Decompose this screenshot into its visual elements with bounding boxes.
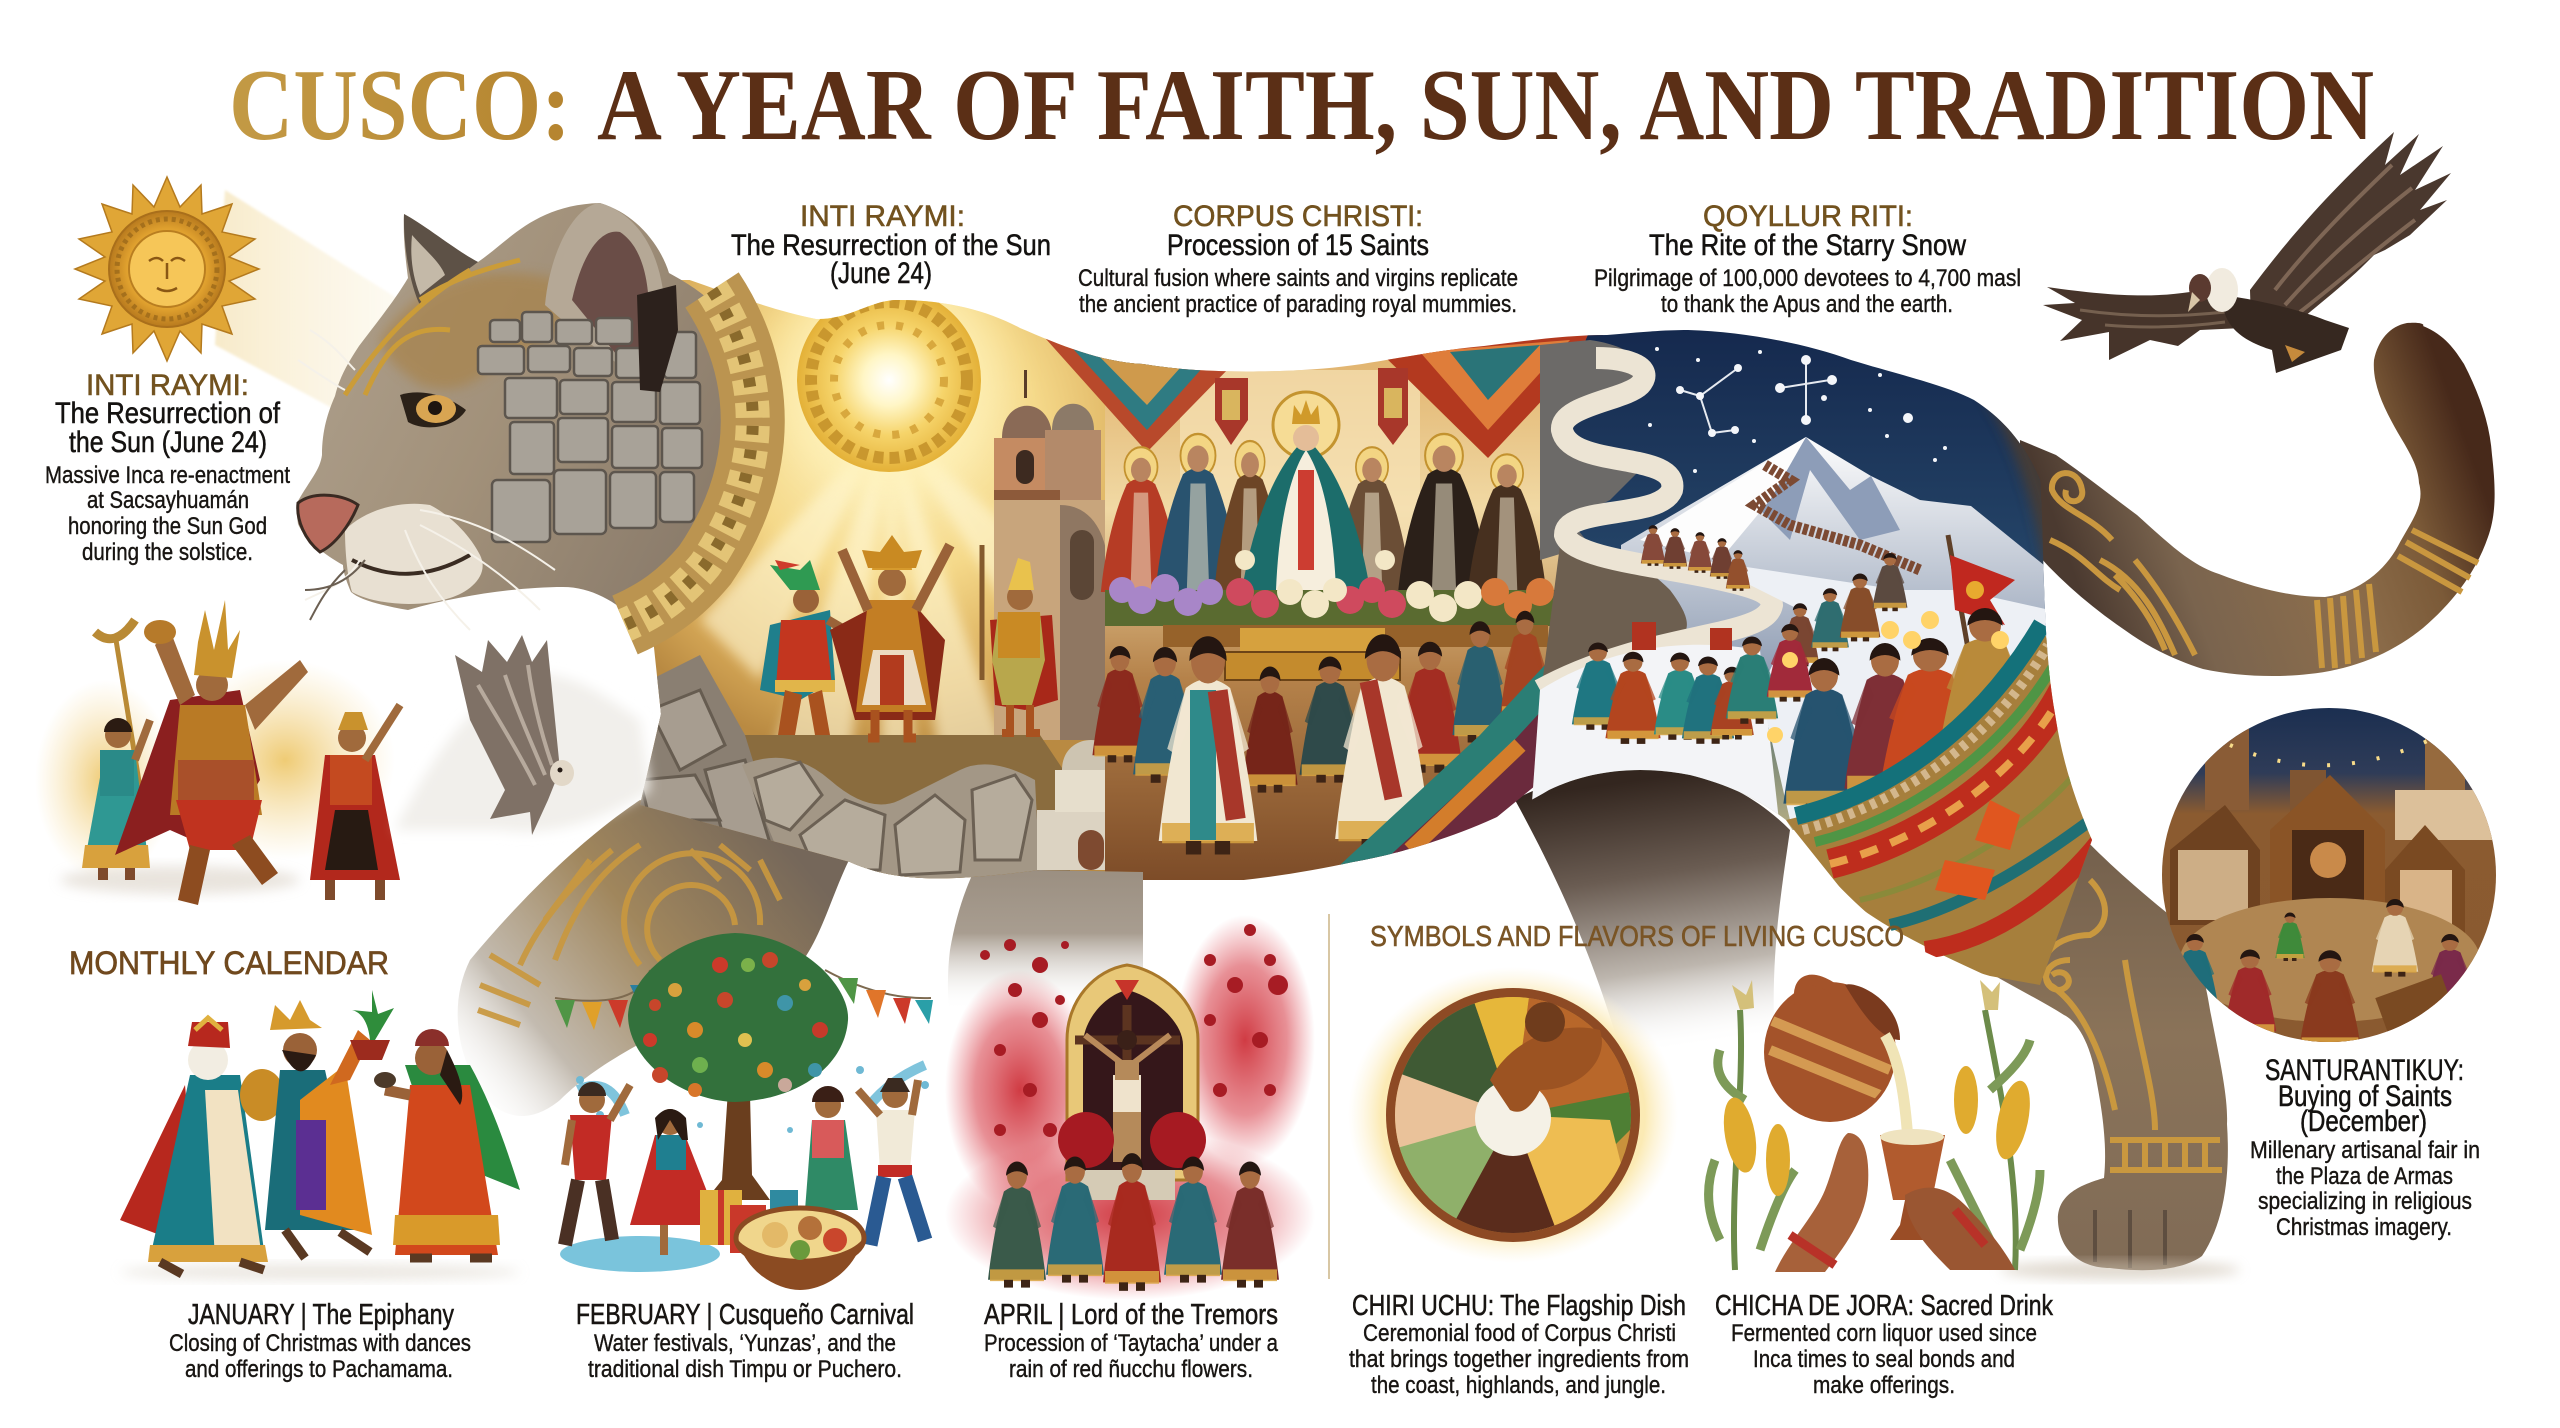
puma tail (2020, 323, 2495, 676)
flag with sun (1948, 535, 2015, 660)
text block: Qoyllur Riti: to thank the Apus and the earth. (1661, 291, 1953, 318)
text block: Qoyllur Riti: The Rite of the Starry Snow (1649, 229, 1966, 262)
text block: Santurantikuy (2250, 1054, 2480, 1241)
text block: Santurantikuy: Christmas imagery. (2276, 1214, 2452, 1241)
king 3 (374, 1029, 520, 1258)
pilgrim line on the mountain (1755, 465, 1920, 570)
eye (400, 392, 466, 427)
left text block: Inti Raymi: Massive Inca re-enactment (45, 462, 290, 489)
virgin with halo and saints (1101, 392, 1546, 592)
church towers (994, 370, 1109, 740)
text block: Corpus Christi: Cultural fusion where saints and virgins replicate (1078, 265, 1518, 292)
heading: symbols and flavors: SYMBOLS AND FLAVORS OF LIVING CUSCO (1370, 921, 1904, 953)
pouring chicha stream (1885, 1035, 1908, 1140)
section: Inti Raymi golden scene (640, 280, 1140, 878)
puma near rear leg with gold patterns (1985, 800, 2240, 1279)
winding snow road and stone wall (1530, 358, 2050, 830)
caption: February: Water festivals, ‘Yunzas’, and the (594, 1330, 896, 1357)
caption: April: Procession of ‘Taytacha’ under a (984, 1330, 1279, 1357)
text block: Santurantikuy: (December) (2300, 1105, 2427, 1138)
flower row (1105, 550, 1555, 626)
sun disc (774, 300, 1008, 472)
text block: Corpus Christi (1078, 200, 1518, 318)
caption: Chiri Uchu: Ceremonial food of Corpus Christi (1363, 1320, 1676, 1347)
procession figures (988, 1153, 1279, 1291)
tan forehead patch (380, 272, 569, 389)
caption: Chiri Uchu: CHIRI UCHU: The Flagship Dish (1352, 1290, 1686, 1322)
tree canopy (628, 933, 848, 1102)
king 1 (120, 1018, 284, 1274)
caption: February (576, 1299, 914, 1383)
woman right (310, 705, 400, 900)
illustration: Chicha de Jora (1709, 980, 2040, 1272)
woman left (82, 718, 150, 880)
caption: Chicha de Jora: make offerings. (1813, 1372, 1955, 1399)
caption: April (984, 1299, 1279, 1383)
left text block: Inti Raymi: at Sacsayhuamán (87, 487, 249, 514)
icon: condor in flight (2043, 132, 2451, 373)
crowd (1092, 611, 1550, 854)
left text block: Inti Raymi: the Sun (June 24) (69, 426, 267, 459)
left text block: Inti Raymi: The Resurrection of (55, 397, 281, 430)
left text block: Inti Raymi: INTI RAYMI: (86, 369, 249, 402)
left dancers illustration (35, 600, 400, 905)
text block: Inti Raymi centre: (June 24) (830, 257, 932, 290)
text block: Corpus Christi: the ancient practice of parading royal mummies. (1079, 291, 1517, 318)
text block: Santurantikuy: specializing in religious (2258, 1188, 2472, 1215)
light beam from sun icon to puma head (215, 190, 400, 415)
illustration: April Lord of the Tremors (945, 915, 1315, 1300)
heading: monthly calendar: MONTHLY CALENDAR (69, 945, 389, 981)
icon: small eagle (455, 635, 574, 835)
puma front leg with gold patterns (458, 800, 849, 1116)
gifts (700, 1190, 798, 1253)
stars and constellations (1648, 347, 1947, 473)
stone blocks (478, 312, 702, 542)
caption: Chicha de Jora (1715, 1290, 2053, 1399)
ornaments (643, 952, 828, 1097)
warrior (115, 600, 308, 905)
market stalls (2170, 775, 2465, 940)
whiskers (298, 330, 555, 630)
textile band at hip (1786, 624, 2110, 990)
text block: Inti Raymi centre: The Resurrection of the Sun (731, 229, 1051, 262)
left text block: Inti Raymi (45, 369, 290, 566)
caption: Chiri Uchu: the coast, highlands, and jungle. (1371, 1372, 1666, 1399)
Inca figures (760, 535, 1058, 738)
greek key collar (625, 290, 753, 625)
string lights (2229, 740, 2428, 768)
text block: Santurantikuy: Buying of Saints (2278, 1080, 2452, 1113)
dark shadow behind ear (637, 285, 678, 392)
carnival dancers (565, 1078, 925, 1255)
corn plants (1709, 980, 2040, 1270)
illustration: January three kings (120, 990, 520, 1280)
caption: Chiri Uchu: that brings together ingredients from (1349, 1346, 1689, 1373)
text block: Inti Raymi centre (731, 200, 1051, 290)
staff (95, 620, 142, 800)
small colonial church (1037, 740, 1105, 870)
puma torso with festival scenes (600, 270, 2110, 990)
puma stone front leg (948, 790, 1143, 1050)
caption: April: APRIL | Lord of the Tremors (984, 1299, 1278, 1331)
left text block: Inti Raymi: during the solstice. (82, 539, 253, 566)
dish: Timpu bowl (736, 1208, 864, 1290)
section: Qoyllur Riti night scene (1530, 330, 2110, 990)
text block: Santurantikuy: the Plaza de Armas (2276, 1163, 2453, 1190)
caption: Chiri Uchu (1349, 1290, 1689, 1399)
gold altar (1163, 625, 1548, 680)
red flower bunches (1058, 1112, 1114, 1168)
caption: February: FEBRUARY | Cusqueño Carnival (576, 1299, 914, 1331)
pilgrims (1572, 525, 2031, 813)
text block: Corpus Christi: CORPUS CHRISTI: (1173, 200, 1423, 233)
ears (404, 203, 665, 380)
caption: January: and offerings to Pachamama. (185, 1356, 453, 1383)
falling petals (980, 924, 1288, 1137)
section: Corpus Christi scene (1046, 335, 1603, 880)
puma far rear leg (1515, 768, 1790, 1050)
caption: Chicha de Jora: CHICHA DE JORA: Sacred Drink (1715, 1290, 2053, 1322)
trunk (700, 1050, 790, 1200)
caption: Chicha de Jora: Inca times to seal bonds and (1753, 1346, 2015, 1373)
illustration: February carnival tree (555, 933, 933, 1290)
stone ledge and rocks (630, 655, 1070, 880)
cup and hands (1775, 1129, 2015, 1272)
shrine (1067, 965, 1198, 1200)
snow mountains (1621, 437, 2050, 680)
water splashes and puddle (560, 1065, 929, 1272)
caption: January: JANUARY | The Epiphany (188, 1299, 454, 1331)
tapestry chevrons (1046, 335, 1603, 458)
towers (2205, 728, 2492, 840)
illustration: Chiri Uchu plate (1348, 967, 1678, 1263)
left text block: Inti Raymi: honoring the Sun God (68, 513, 267, 540)
puma head (297, 203, 754, 638)
caption: February: traditional dish Timpu or Puchero. (588, 1356, 902, 1383)
text block: Santurantikuy: Millenary artisanal fair in (2250, 1137, 2480, 1164)
text block: Qoyllur Riti: QOYLLUR RITI: (1703, 200, 1913, 233)
text block: Inti Raymi centre: INTI RAYMI: (800, 200, 965, 233)
jug (1764, 980, 1900, 1122)
king 2 (265, 990, 394, 1258)
title: A YEAR OF FAITH, SUN, AND TRADITION (597, 49, 2374, 162)
market crowd (2172, 898, 2480, 1052)
title: CUSCO: (229, 49, 571, 162)
text block: Qoyllur Riti (1594, 200, 2021, 318)
illustration: Santurantikuy market circle (2160, 700, 2500, 1052)
text block: Corpus Christi: Procession of 15 Saints (1167, 229, 1429, 262)
muzzle and jaw (345, 504, 483, 604)
caption: Chicha de Jora: Fermented corn liquor used since (1731, 1320, 2037, 1347)
icon: inca sun with face (75, 177, 259, 361)
diagonal textile band (1340, 666, 1544, 865)
pale hills behind small eagle (395, 675, 650, 832)
caption: January: Closing of Christmas with dances (169, 1330, 471, 1357)
gold forehead lines (345, 260, 520, 395)
nose (298, 495, 358, 552)
caption: April: rain of red ñucchu flowers. (1009, 1356, 1253, 1383)
text block: Qoyllur Riti: Pilgrimage of 100,000 devotees to 4,700 masl (1594, 265, 2021, 292)
bunting (555, 970, 933, 1030)
caption: January (169, 1299, 471, 1383)
text block: Santurantikuy: SANTURANTIKUY: (2265, 1054, 2464, 1087)
